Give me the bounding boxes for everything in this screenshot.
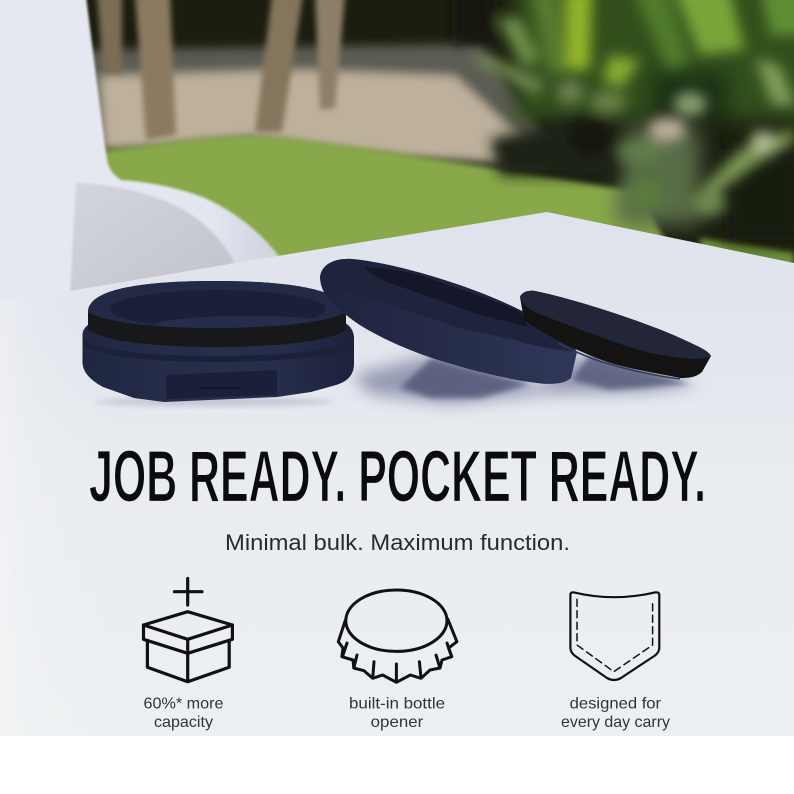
label: bottle opener: built-in bottle: [349, 696, 445, 712]
white table surface: [0, 212, 794, 736]
label: capacity: 60%* more: [144, 696, 224, 712]
product: small disc lid: [520, 291, 711, 379]
icon: bottle cap: [338, 590, 457, 682]
blurred garden background: [0, 0, 794, 300]
label: bottle opener: [349, 696, 445, 731]
icon: pocket: [570, 592, 659, 680]
label: capacity: capacity: [154, 714, 213, 731]
bush: [456, 0, 794, 240]
product shadows on table: [95, 354, 700, 406]
white chair: [0, 0, 283, 312]
subheading: Minimal bulk. Maximum function.: [225, 530, 570, 555]
feature: every day carry: [561, 592, 670, 731]
tin label recess: [166, 370, 277, 399]
label: bottle opener: opener: [371, 714, 424, 731]
label: every day carry: every day carry: [561, 714, 670, 731]
feature: bottle opener: [338, 590, 457, 731]
label: capacity: [144, 696, 224, 731]
feature: capacity: [144, 578, 232, 731]
product: tilted middle lid: [320, 259, 577, 384]
label: every day carry: [561, 696, 670, 731]
product: open tin base: [82, 281, 354, 402]
label: every day carry: designed for: [570, 696, 662, 712]
icon: box with plus: [144, 578, 232, 682]
